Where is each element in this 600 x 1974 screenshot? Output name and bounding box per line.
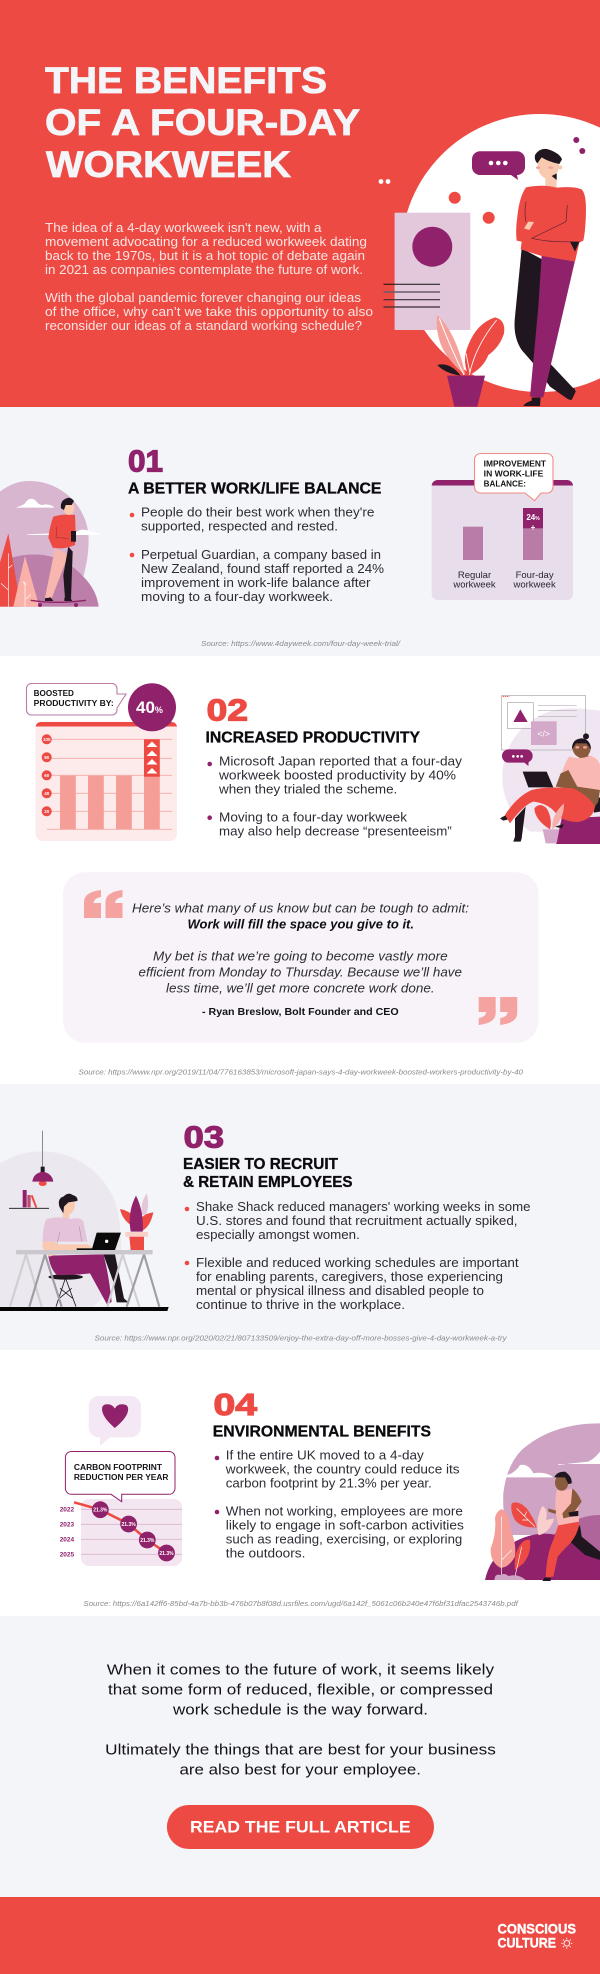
intro text: reconsider our ideas of a standard working schedule? (45, 318, 362, 333)
title (45, 59, 360, 185)
bullet list: When not working, employees are more (226, 1504, 463, 1519)
panel: footer (0, 1897, 600, 1974)
bullet list: improvement in work-life balance after (141, 575, 371, 590)
intro text: back to the 1970s, but it is a hot topic of debate again (45, 248, 365, 263)
bullet list: Flexible and reduced working schedules are important (196, 1255, 519, 1270)
bar chart: improvement in work-life balance: Regular (458, 570, 491, 581)
intro text: in 2021 as companies contemplate the future of work. (45, 262, 363, 277)
quote text: Here’s what many of us know but can be tough to admit: (132, 901, 469, 916)
bar chart: improvement in work-life balance: workweek (512, 580, 556, 591)
bullet list: for enabling parents, caregivers, those experiencing (196, 1269, 503, 1284)
bullet list: If the entire UK moved to a 4-day (226, 1448, 424, 1463)
bullet list: Microsoft Japan reported that a four-day (219, 754, 463, 769)
40 percent badge (128, 683, 176, 731)
line chart: carbon footprint reduction (60, 1452, 182, 1566)
button (167, 1805, 434, 1849)
bullet list: such as reading, exercising, or exploring (226, 1532, 462, 1547)
bullet list: moving to a four-day workweek. (141, 589, 333, 604)
bullet list: supported, respected and rested. (141, 519, 338, 534)
quote text: Work will fill the space you give to it. (188, 916, 414, 931)
line chart: carbon footprint reduction: 21.3% (93, 1508, 108, 1514)
bullet list: mental or physical illness and disabled people to (196, 1283, 484, 1298)
number 04: 04 (214, 1387, 258, 1422)
conclusion text: work schedule is the way forward. (172, 1701, 428, 1718)
line chart: carbon footprint reduction: 2025 (60, 1552, 75, 1559)
bullet list (130, 505, 384, 604)
panel: section 03 recruit and retain (0, 1084, 600, 1350)
callout: IMPROVEMENT (484, 460, 546, 469)
conclusion text: are also best for your employee. (180, 1761, 421, 1778)
conclusion text: that some form of reduced, flexible, or compressed (108, 1681, 493, 1698)
icon: chat bubble (502, 749, 533, 766)
bullet list: continue to thrive in the workplace. (196, 1297, 405, 1312)
quote text (132, 901, 469, 996)
callout (26, 684, 126, 715)
bullet list: New Zealand, found staff reported a 24% (141, 561, 384, 576)
logo (498, 1921, 576, 1950)
bullet list: may also help decrease “presenteeism” (219, 824, 452, 839)
number 03: 03 (184, 1120, 224, 1155)
conclusion text (105, 1661, 496, 1778)
title: WORKWEEK (46, 143, 291, 185)
source: Source: https://www.npr.org/2020/02/21/807133509/enjoy-the-extra-day-off-more-bosses-give-4-day-workweek-a-try (94, 1333, 508, 1342)
callout (474, 454, 553, 501)
heading (183, 1156, 352, 1191)
illustration: woman with laptop: </> (537, 728, 550, 738)
title: OF A FOUR-DAY (45, 101, 360, 143)
panel: conclusion (0, 1616, 600, 1897)
line chart: carbon footprint reduction: 21.3% (122, 1522, 136, 1528)
icon: closing quote mark (479, 997, 517, 1025)
heading: & RETAIN EMPLOYEES (183, 1174, 352, 1191)
quote text: less time, we’ll get more concrete work done. (166, 981, 435, 996)
heading: A BETTER WORK/LIFE BALANCE (128, 480, 382, 497)
button: READ THE FULL ARTICLE (190, 1818, 411, 1837)
number 01: 01 (128, 444, 163, 479)
title: THE BENEFITS (45, 59, 327, 101)
line chart: carbon footprint reduction: 21.3% (159, 1551, 174, 1557)
callout: IN WORK-LIFE (484, 470, 544, 479)
logo: CONSCIOUS (498, 1921, 576, 1936)
bullet list (215, 1448, 464, 1561)
intro text: With the global pandemic forever changing our ideas (45, 290, 361, 305)
illustration: woman with laptop (500, 696, 600, 844)
heading: ENVIRONMENTAL BENEFITS (213, 1423, 431, 1440)
bullet list (185, 1199, 530, 1312)
callout (65, 1452, 175, 1502)
illustration: person on skateboard (0, 481, 102, 607)
panel: section 01 work/life balance (0, 407, 600, 656)
source: Source: https://6a142ff6-85bd-4a7b-bb3b-476b07b8f08d.usrfiles.com/ugd/6a142f_5061c06b240e47f6bf31dfac2543746b.pdf (83, 1599, 519, 1608)
line chart: carbon footprint reduction: 2023 (60, 1522, 75, 1529)
panel: quote (63, 872, 538, 1043)
bullet list: workweek boosted productivity by 40% (218, 768, 456, 783)
bullet list: especially amongst women. (196, 1227, 360, 1242)
icon: sun (561, 1938, 572, 1949)
line chart: carbon footprint reduction: 21.3% (140, 1538, 155, 1544)
logo: CULTURE (498, 1935, 556, 1950)
bar chart: boosted productivity: 80 (44, 755, 50, 760)
40 percent badge: 40% (136, 698, 163, 717)
bar chart: boosted productivity: 100 (43, 737, 51, 742)
bullet list: the outdoors. (226, 1546, 305, 1561)
bar chart: boosted productivity: 60 (44, 773, 50, 778)
callout: CARBON FOOTPRINT (74, 1463, 162, 1472)
panel: hero (0, 0, 600, 407)
bullet list: when they trialed the scheme. (218, 782, 397, 797)
bar chart: improvement in work-life balance: + (531, 523, 536, 532)
bullet list: carbon footprint by 21.3% per year. (226, 1476, 432, 1491)
bar chart: improvement in work-life balance: workweek (452, 580, 496, 591)
bar chart: improvement in work-life balance (432, 454, 573, 600)
intro text (45, 220, 373, 333)
bullet list: People do their best work when they're (141, 505, 374, 520)
bullet list: Moving to a four-day workweek (219, 810, 408, 825)
illustration: woman running (485, 1423, 600, 1581)
panel: section 04 environmental benefits (0, 1350, 600, 1616)
bar chart: boosted productivity (26, 683, 177, 841)
intro text: movement advocating for a reduced workweek dating (45, 234, 367, 249)
bullet list: U.S. stores and found that recruitment actually spiked, (196, 1213, 518, 1228)
callout: REDUCTION PER YEAR (74, 1473, 169, 1482)
source: Source: https://www.npr.org/2019/11/04/776163853/microsoft-japan-says-4-day-workweek-boosted-workers-productivity-by-40 (78, 1067, 524, 1076)
bar chart: improvement in work-life balance: 24% (526, 513, 540, 522)
bullet list: Shake Shack reduced managers' working weeks in some (196, 1199, 530, 1214)
source: Source: https://www.4dayweek.com/four-day-week-trial/ (201, 639, 401, 648)
intro text: of the office, why can’t we take this opportunity to also (45, 304, 373, 319)
illustration: man with document and plant (379, 114, 600, 407)
conclusion text: When it comes to the future of work, it seems likely (107, 1661, 495, 1678)
conclusion text: Ultimately the things that are best for your business (105, 1741, 496, 1758)
line chart: carbon footprint reduction: 2022 (60, 1507, 75, 1514)
attribution: - Ryan Breslow, Bolt Founder and CEO (202, 1007, 399, 1018)
bullet list: likely to engage in soft-carbon activities (226, 1518, 464, 1533)
intro text: The idea of a 4-day workweek isn't new, with a (45, 220, 322, 235)
bullet list: Perpetual Guardian, a company based in (141, 547, 381, 562)
callout: BOOSTED (34, 689, 74, 698)
document card (384, 213, 470, 330)
quote text: My bet is that we’re going to become vastly more (153, 949, 448, 964)
bar chart: improvement in work-life balance: Four-day (516, 570, 554, 581)
bar chart: boosted productivity: 40 (44, 791, 50, 796)
icon: opening quote mark (84, 890, 122, 918)
icon: heart bubble (89, 1396, 141, 1446)
bar chart: boosted productivity: 20 (44, 809, 50, 814)
plant and person (437, 149, 586, 407)
heading: INCREASED PRODUCTIVITY (206, 729, 421, 746)
illustration: person at desk (0, 1131, 169, 1311)
callout: BALANCE: (484, 479, 526, 488)
line chart: carbon footprint reduction: 2024 (60, 1537, 75, 1544)
panel: section 02 productivity (0, 656, 600, 1084)
heading: EASIER TO RECRUIT (183, 1156, 339, 1173)
number 02: 02 (207, 693, 248, 728)
quote text: efficient from Monday to Thursday. Because we’ll have (138, 965, 462, 980)
bullet list: workweek, the country could reduce its (225, 1462, 460, 1477)
icon: chat bubble (472, 151, 525, 180)
bullet list (207, 754, 463, 839)
callout: PRODUCTIVITY BY: (34, 699, 114, 708)
